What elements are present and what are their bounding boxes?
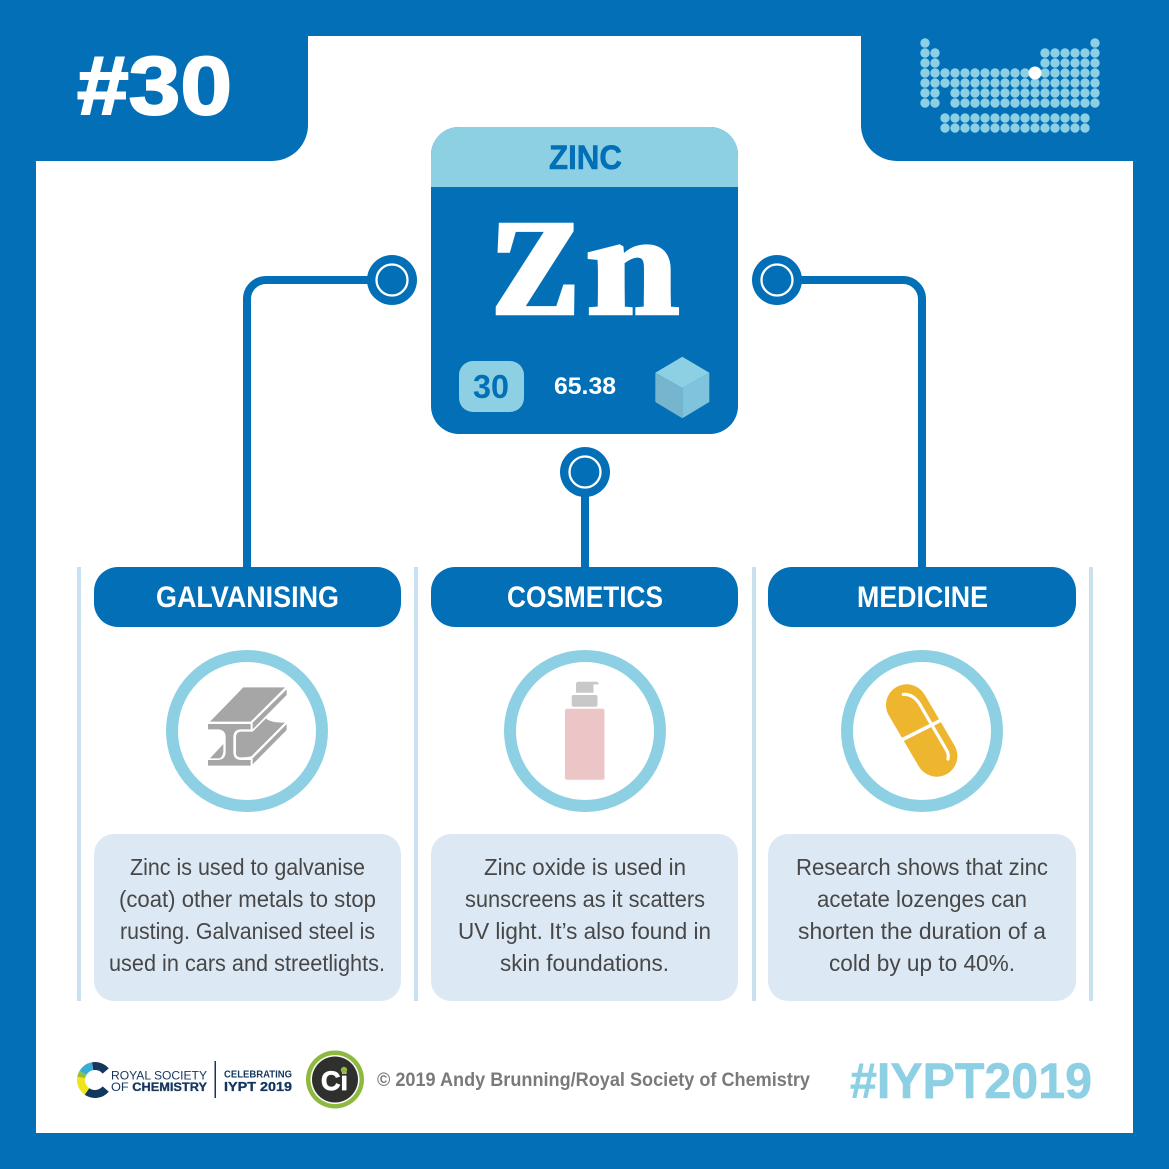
logo: Royal Society of Chemistry: OF CHEMISTRY xyxy=(111,1080,207,1094)
text: galvanising description: used in cars and streetlights. xyxy=(109,950,385,976)
text: cosmetics description: UV light. It’s also found in xyxy=(458,918,711,944)
text: galvanising description: (coat) other metals to stop xyxy=(119,886,376,912)
panel: cosmetics xyxy=(431,567,738,1001)
node: left connector xyxy=(367,255,417,305)
element symbol: n xyxy=(587,177,680,347)
heading: #30: #30 xyxy=(77,39,232,132)
panel: medicine xyxy=(768,567,1076,1001)
heading: medicine xyxy=(768,567,1076,627)
heading: medicine: MEDICINE xyxy=(857,581,988,614)
hashtag: #IYPT2019 xyxy=(850,1053,1092,1109)
heading: cosmetics xyxy=(431,567,738,627)
icon: pump bottle xyxy=(510,656,660,806)
icon: RSC ring xyxy=(81,1066,106,1094)
connector: to cosmetics xyxy=(581,472,589,570)
text: medicine description xyxy=(768,834,1076,1001)
atomic number badge: 30 xyxy=(473,368,509,405)
heading: cosmetics: COSMETICS xyxy=(507,581,663,614)
icon: capsule xyxy=(847,656,997,806)
text: galvanising description: Zinc is used to galvanise xyxy=(130,854,365,880)
tab: element number xyxy=(36,36,308,161)
logo: Royal Society of Chemistry: CELEBRATING xyxy=(224,1070,292,1080)
element symbol: Z xyxy=(495,177,576,347)
connector: to medicine xyxy=(777,280,922,570)
atomic mass: 65.38 xyxy=(554,373,616,400)
logo: Royal Society of Chemistry: ROYAL SOCIETY xyxy=(111,1068,207,1082)
icon: crystal cube xyxy=(655,357,709,418)
text: galvanising description: rusting. Galvanised steel is xyxy=(120,918,375,944)
text: galvanising description xyxy=(94,834,401,1001)
heading: galvanising: GALVANISING xyxy=(156,581,339,614)
text: cosmetics description: Zinc oxide is used in xyxy=(484,854,686,880)
text: medicine description: shorten the duration of a xyxy=(798,918,1046,944)
logo: Royal Society of Chemistry xyxy=(81,1061,292,1098)
text: cosmetics description: skin foundations. xyxy=(500,950,669,976)
icon: periodic table dots xyxy=(925,43,1096,128)
logo: Compound Interest: Ci xyxy=(321,1066,348,1096)
panel: galvanising xyxy=(94,567,401,1001)
logo: Royal Society of Chemistry: IYPT 2019 xyxy=(224,1080,292,1094)
icon: steel girder xyxy=(172,656,322,806)
text: cosmetics description xyxy=(431,834,738,1001)
connector: to galvanising xyxy=(247,280,392,570)
element name: ZINC xyxy=(549,139,622,177)
panel: element card xyxy=(431,127,738,434)
heading: galvanising xyxy=(94,567,401,627)
tab: periodic table locator xyxy=(861,36,1133,161)
atomic number badge xyxy=(459,361,524,412)
logo: Compound Interest xyxy=(306,1050,364,1108)
text: cosmetics description: sunscreens as it scatters xyxy=(465,886,705,912)
node: centre connector xyxy=(560,447,610,497)
text: medicine description: cold by up to 40%. xyxy=(829,950,1015,976)
node: right connector xyxy=(752,255,802,305)
text: medicine description: Research shows that zinc xyxy=(796,854,1048,880)
text: medicine description: acetate lozenges can xyxy=(817,886,1027,912)
divider lines xyxy=(77,567,1093,1001)
credit line: © 2019 Andy Brunning/Royal Society of Chemistry xyxy=(377,1070,810,1091)
